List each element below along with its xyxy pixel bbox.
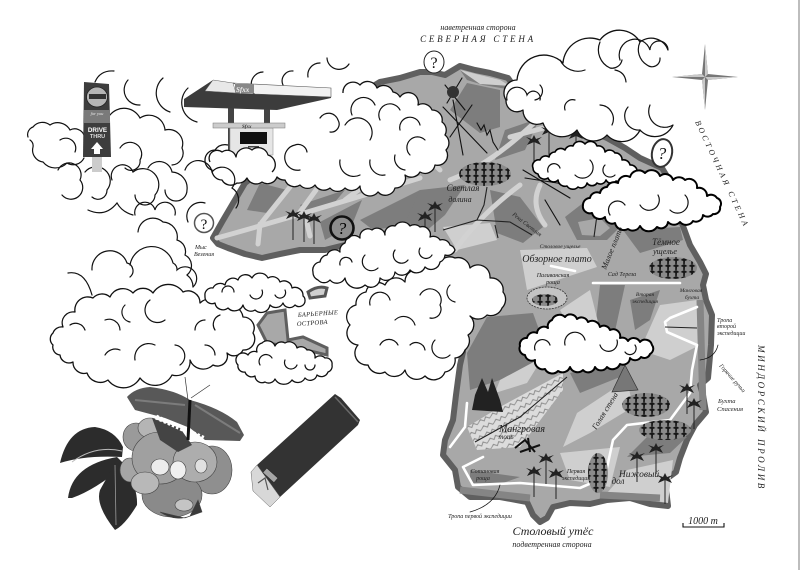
drive-thru sign: THRU [90,134,105,140]
question marker: north east: ? [658,144,667,163]
question marker: west cape [194,214,214,233]
cloud: centre of island [519,314,653,373]
label: east wall: ВОСТОЧНАЯ СТЕНА [693,119,751,230]
label: small plateau: Малое плато [599,226,625,272]
rivers [443,187,697,442]
right edge line [798,0,800,570]
trails [450,266,697,488]
label: lower dale: Нижовый [618,469,659,480]
cloud: north east small [533,141,637,189]
forests [459,162,697,493]
label: grove: Паливанская [536,273,570,279]
label: grove south: Сотановая [471,469,500,475]
station columns [228,103,270,153]
question marker: north east [649,137,675,169]
label: dark gorge: Тёмное [652,237,680,247]
drive-thru sign [83,82,111,172]
terrain bands [217,70,703,503]
lighter [251,394,360,507]
label: garden: Сад Тереза [608,271,636,278]
cloud: east [583,170,721,231]
label: mango bay: Манговая [679,288,703,294]
label: barrier islands line two: ОСТРОВА [297,319,328,328]
label: grove south line two: роща [475,476,490,482]
label: overlook plateau: Обзорное плато [522,254,592,265]
cloud: over barrier islands lower [236,341,332,384]
label: dark gorge second line: ущелье [652,247,677,256]
island map [213,66,712,522]
label: cape of luck line two: Везения [194,252,214,258]
cloud: in front of gas station [209,148,275,172]
label: dale: дол [612,476,624,486]
label: grove second line: роща [545,280,560,286]
label: barrier islands: БАРЬЕРНЫЕ [297,309,338,319]
label: mangrove swamp: Мангровая [498,424,545,435]
label: north wall: СЕВЕРНАЯ СТЕНА [420,34,536,44]
drive-thru sign: DRIVE [88,127,107,134]
label: trail line three: экспедиции [717,330,745,337]
palm trees [285,125,702,504]
gas station [184,80,331,155]
label: second expedition line two: экспедиция [632,298,658,305]
cloud: over barrier islands upper [205,273,305,312]
gas station: Sfxx [236,86,250,94]
label: trail line two: второй [717,323,736,330]
swamp area [467,373,563,450]
question marker: north [424,51,444,73]
drive-thru sign: for you [91,111,104,116]
compass rose [672,44,738,110]
leaves [60,427,137,530]
label: bare wall: Голая стена [590,391,620,432]
label: swamp: топь [498,433,514,441]
label: second expedition trail: Тропа [717,318,732,324]
label: first expedition: Первая [566,469,585,475]
scale bar: 1000 m [688,516,718,527]
flower with butterfly [60,377,244,530]
label: gorge: Столовое ущелье [540,244,581,250]
barrier islands [258,310,327,355]
label: light valley: Светлая [446,183,480,193]
label: valley: долина [448,195,472,204]
cloud: south west bank [50,284,255,388]
butterfly [127,377,244,452]
question marker: peninsula: ? [338,219,347,238]
station kiosk [213,123,285,155]
canopy [184,80,331,110]
cloud: north west bank [205,81,449,196]
label: salvation bay line two: Спасения [717,406,743,413]
icon: arrow [91,142,103,154]
label: first expedition trail: Тропа первой экспедиции [448,513,512,520]
question marker: west cape: ? [201,217,208,233]
icon: burger [86,87,108,107]
rock spires and scribbles [443,78,638,452]
question marker: peninsula [330,216,354,240]
label: light river: Река Светлая [510,211,542,238]
label: table rock: Столовый утёс [513,524,594,538]
flower [120,418,232,518]
station kiosk: Sfxx [242,125,252,130]
cloud: main lower bank [347,257,506,380]
label: salvation bay: Бухта [717,398,735,405]
cloud curls: open wisps [28,39,688,370]
question marker: north: ? [430,55,438,72]
label: hot springs: Горячие ручьи [717,363,746,394]
label: bay: бухта [685,294,699,301]
cloud: north east bank [504,30,673,142]
label: windward side: наветренная сторона [440,23,516,32]
cloud: central small bank [313,222,455,288]
label: first expedition line two: экспедиция [562,475,590,482]
label: second expedition: Вторая [636,292,655,298]
label: cape of luck: Мыс [194,245,207,251]
pointer lines [470,345,718,512]
island landmass [213,66,712,522]
label: leeward side: подветренная сторона [512,540,592,549]
label: mindoro strait: МИНДОРСКИЙ ПРОЛИВ [756,344,766,491]
